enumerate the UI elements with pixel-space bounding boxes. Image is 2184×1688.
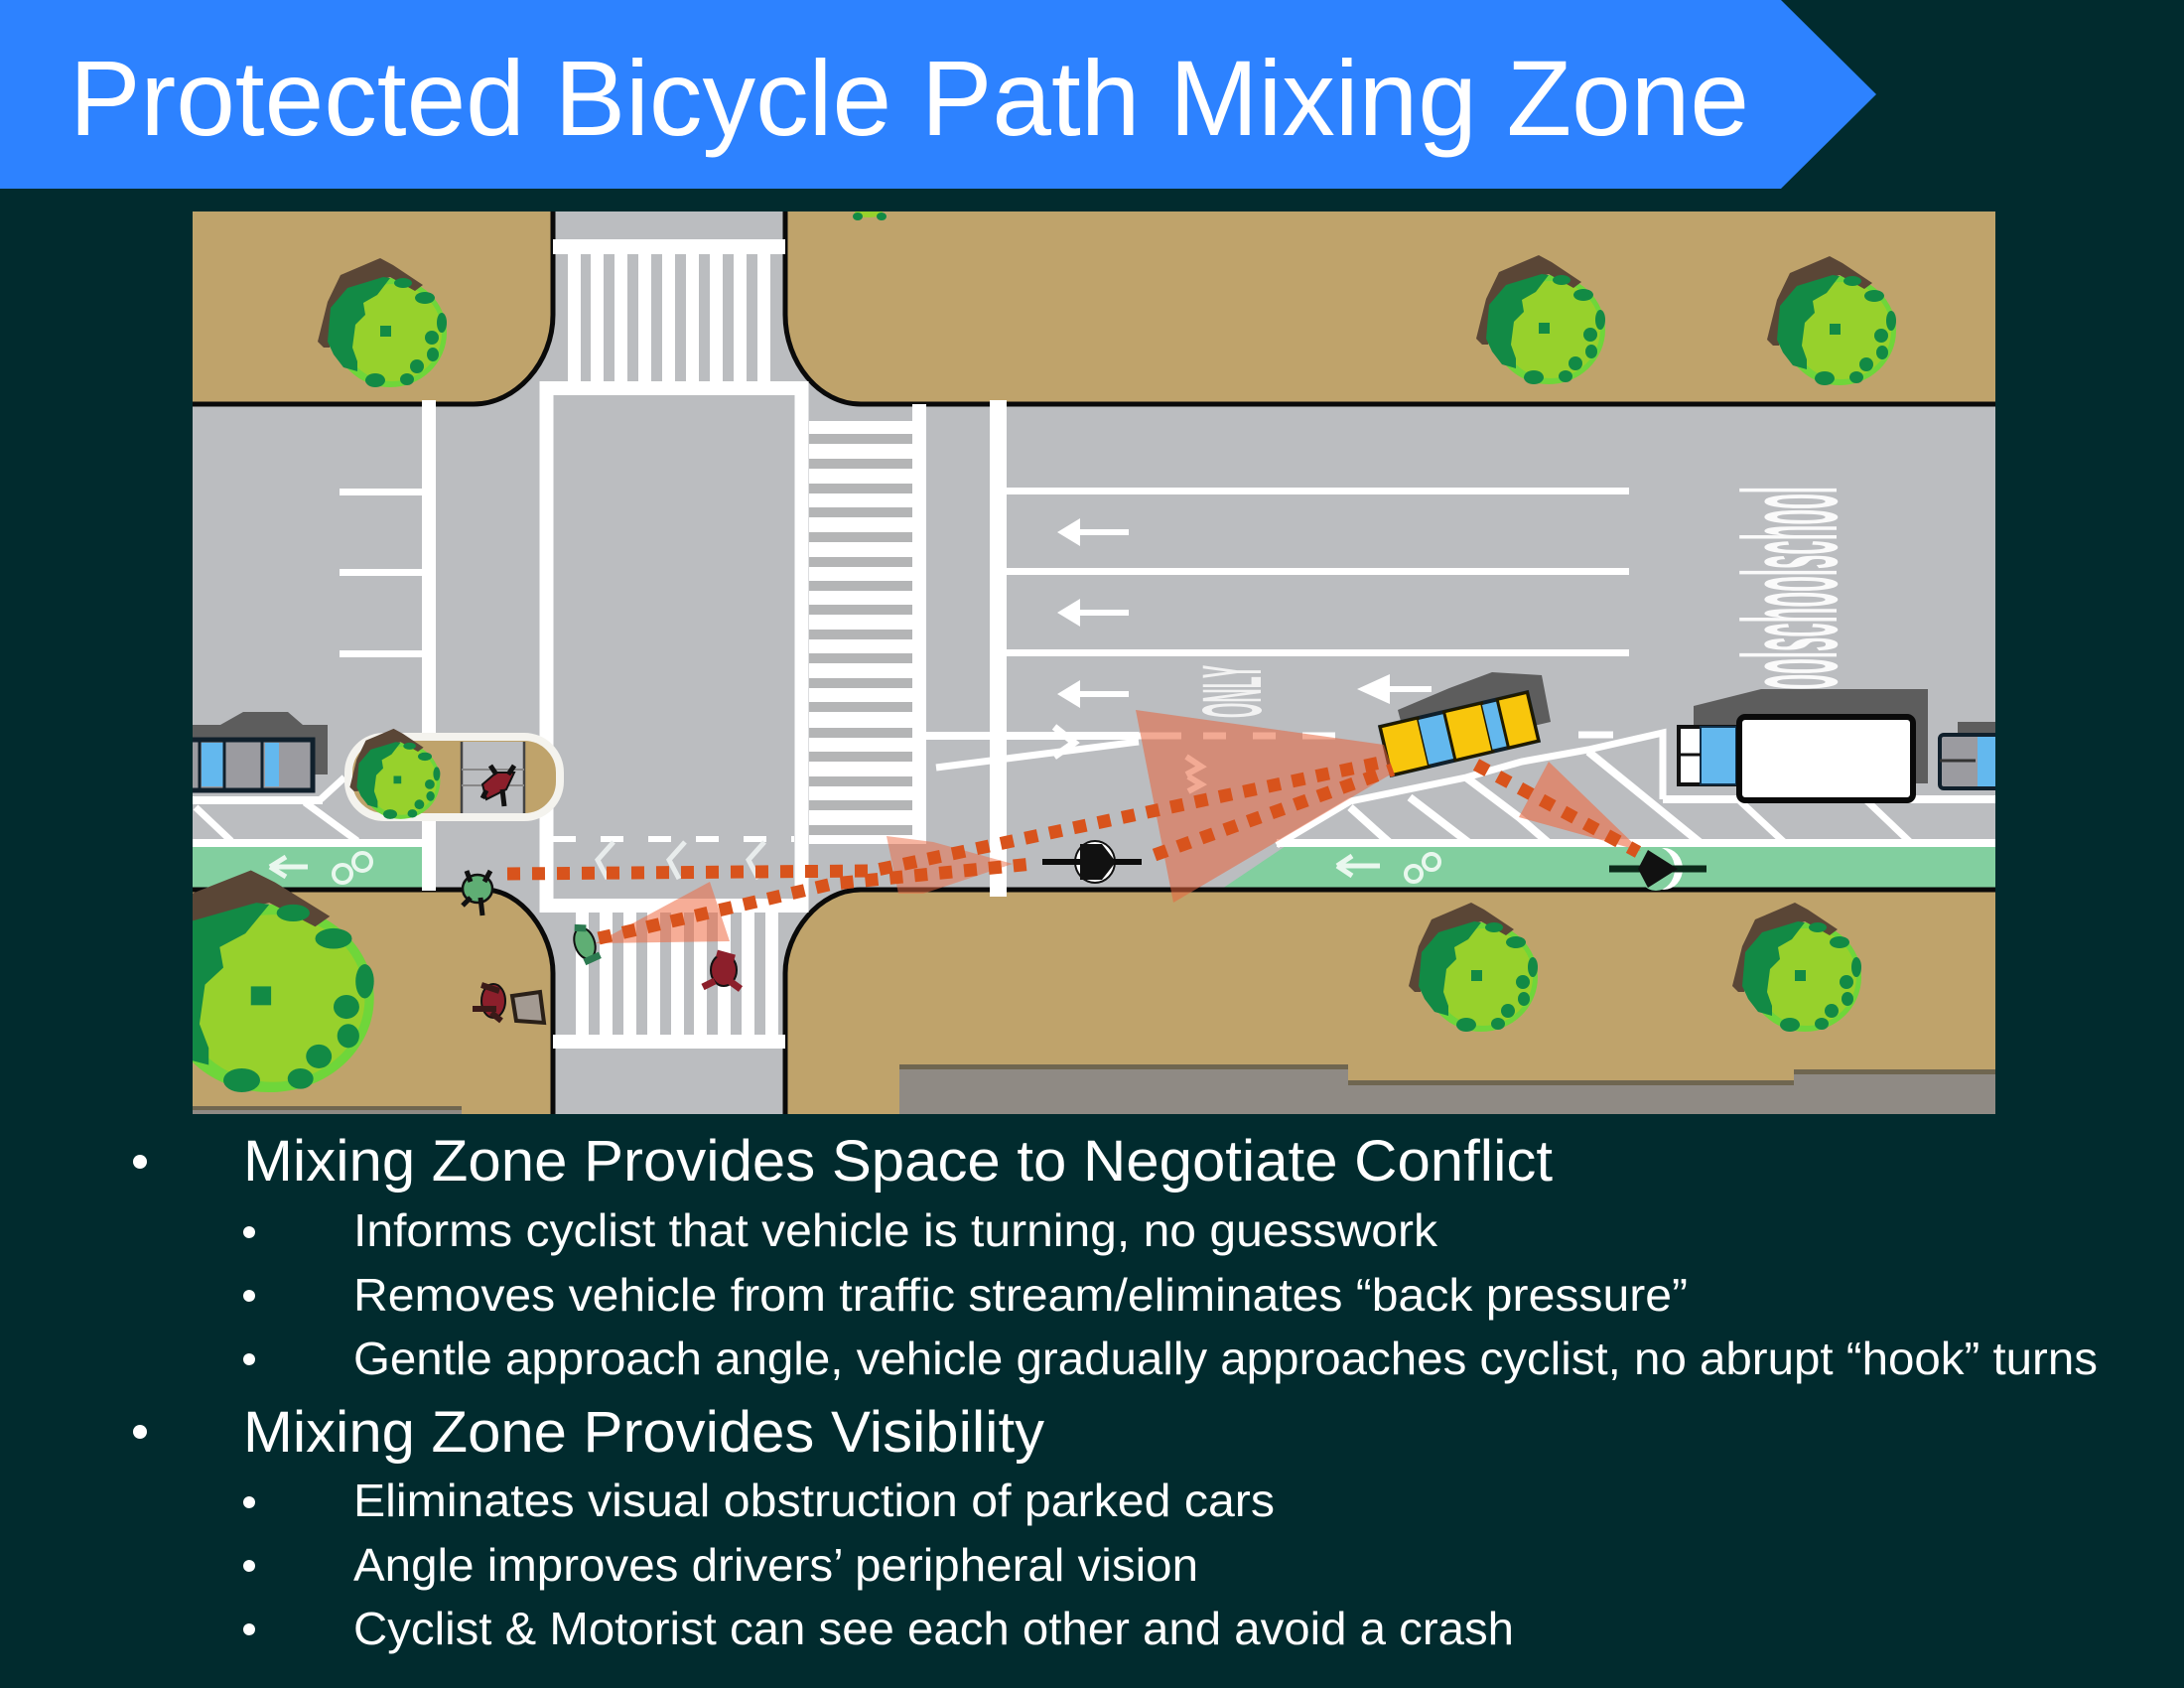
stop lines <box>422 400 1007 897</box>
mixing zone lane markings <box>926 727 1613 791</box>
bike lane symbols <box>270 853 1439 883</box>
item 2.2: Angle improves drivers’ peripheral vision <box>353 1539 1198 1591</box>
parked car right <box>1940 722 1999 788</box>
right crosswalk <box>809 404 926 844</box>
lane lines <box>340 488 1629 657</box>
turning car <box>1380 672 1551 775</box>
pedestrian: red with stroller <box>473 984 544 1023</box>
pedestrian: green at curb <box>463 871 492 915</box>
bottom crosswalk <box>553 912 785 1049</box>
text block: bullet list <box>133 1129 2098 1654</box>
sight triangle: right cyclist <box>1519 762 1641 851</box>
green bike lane <box>193 846 1995 891</box>
item 1.3: Gentle approach angle, vehicle gradually approaches cyclist, no abrupt “hook” turns <box>353 1333 2098 1384</box>
sight triangle: motorist view <box>1136 710 1394 903</box>
parking hatching and taper lines <box>193 733 1995 845</box>
sidewalk blocks <box>193 211 1995 1114</box>
item 1.2: Removes vehicle from traffic stream/eliminates “back pressure” <box>353 1269 1688 1321</box>
road surface <box>193 211 1995 1114</box>
pedestrian refuge island <box>348 737 560 817</box>
curbs <box>193 211 1995 1114</box>
dashed bike crossing with chevrons <box>553 839 794 879</box>
buildings <box>193 1064 1995 1114</box>
trees <box>135 208 1896 1092</box>
delivery truck <box>1679 689 1928 800</box>
sight triangle: pedestrian <box>596 882 730 943</box>
heading 1: Mixing Zone Provides Space to Negotiate Conflict <box>243 1129 1553 1194</box>
street diagram <box>135 208 1999 1114</box>
top crosswalk <box>553 239 785 381</box>
sight triangle: crossing bike path <box>887 836 1013 894</box>
title: Protected Bicycle Path Mixing Zone <box>69 38 1749 158</box>
item 2.1: Eliminates visual obstruction of parked cars <box>353 1475 1275 1526</box>
dotted sight lines <box>507 763 1638 938</box>
parked car left <box>189 712 328 790</box>
cyclist left <box>1042 841 1142 883</box>
pedestrian: red on island <box>482 766 514 806</box>
lane arrows <box>1057 518 1432 708</box>
title banner <box>0 0 1876 189</box>
cyclist right <box>1609 847 1706 891</box>
heading 2: Mixing Zone Provides Visibility <box>243 1400 1044 1465</box>
intersection box outline <box>546 388 802 906</box>
item 1.1: Informs cyclist that vehicle is turning, no guesswork <box>353 1204 1438 1256</box>
pedestrian: green in crosswalk <box>570 922 601 963</box>
street diagram: ONLY <box>1185 665 1279 718</box>
item 2.3: Cyclist & Motorist can see each other and avoid a crash <box>353 1603 1514 1654</box>
pedestrian: red in crosswalk <box>703 953 741 989</box>
